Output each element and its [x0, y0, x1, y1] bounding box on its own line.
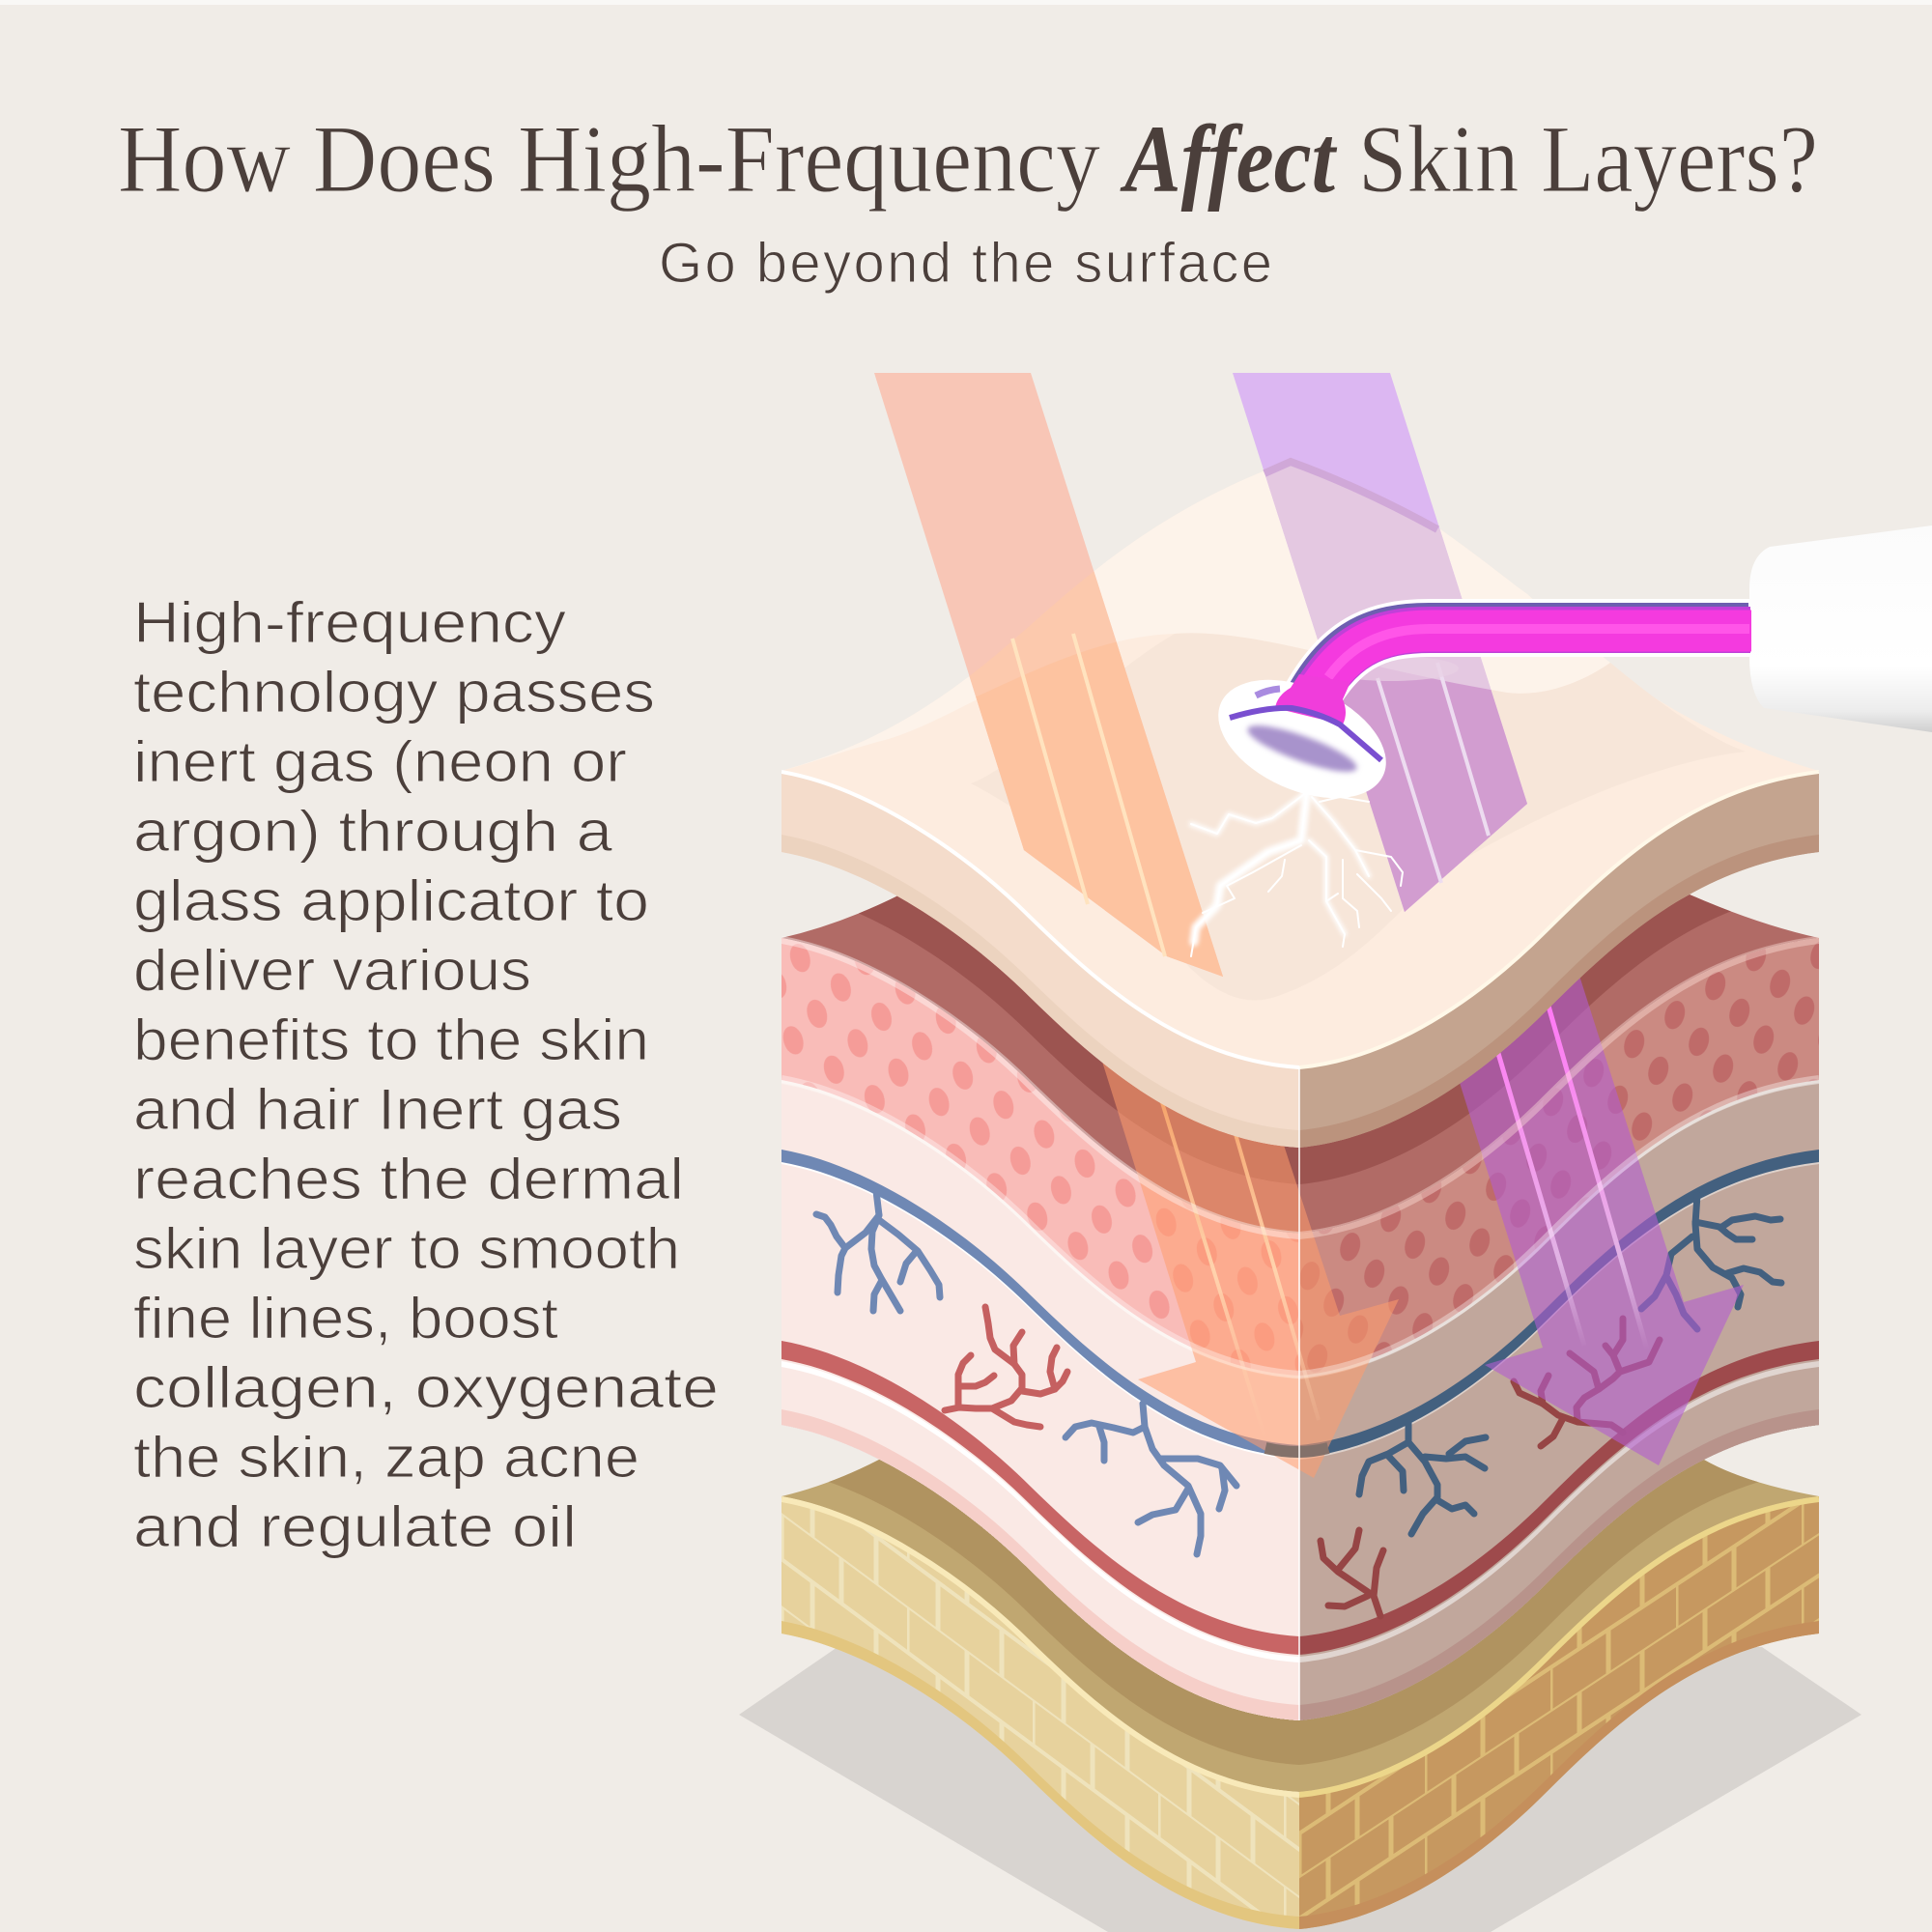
fat top surface [781, 1460, 1819, 1792]
body text: and hair Inert gas [133, 1077, 622, 1142]
body text [133, 590, 719, 1559]
ground shadow [739, 1647, 1861, 1932]
title [118, 105, 1818, 213]
top skin surface [781, 461, 1819, 1066]
top layer front faces [781, 770, 1819, 1148]
body text: benefits to the skin [133, 1008, 649, 1072]
body text: reaches the dermal [133, 1147, 684, 1211]
center vertical edge highlight [1298, 1066, 1300, 1720]
body text: skin layer to smooth [133, 1216, 680, 1281]
arrow: purple penetrating arrow [1451, 952, 1744, 1465]
translucent layer edge highlights [781, 940, 1819, 1375]
blue vein [781, 1150, 1819, 1720]
body text: inert gas (neon or [133, 729, 627, 794]
wand handle [1749, 526, 1932, 732]
arrow: orange penetrating arrow [1094, 1034, 1399, 1478]
body text: the skin, zap acne [133, 1425, 639, 1490]
lightning discharge [1191, 790, 1403, 956]
body text: argon) through a [133, 799, 613, 864]
body text: High-frequency [133, 590, 566, 655]
subtitle: Go beyond the surface [659, 232, 1272, 295]
fat front faces with cells [781, 1496, 1819, 1931]
dotted front faces [781, 938, 1819, 1376]
body text: deliver various [133, 938, 531, 1003]
capillaries right red G [1514, 1319, 1660, 1446]
beam: purple [1233, 373, 1527, 912]
body text: fine lines, boost [133, 1286, 558, 1350]
central dip [971, 633, 1746, 1000]
glass applicator tube [1303, 627, 1751, 713]
fat layer (hypodermis) [781, 1460, 1819, 1929]
title: Skin Layers? [1358, 105, 1818, 213]
body text: collagen, oxygenate [133, 1355, 719, 1420]
capillaries left blue C [1065, 1404, 1236, 1554]
capillaries right blue D [1641, 1195, 1781, 1329]
capillaries left red B [945, 1307, 1067, 1427]
capillaries right blue E [1359, 1423, 1486, 1534]
body text: and regulate oil [133, 1494, 577, 1559]
applicator glass head [1200, 656, 1405, 822]
body text: glass applicator to [133, 868, 649, 933]
upper surface hump [781, 461, 1610, 771]
title: Affect [1120, 105, 1338, 213]
red artery [781, 1341, 1819, 1720]
dermis light layer with blood vessels [781, 1080, 1819, 1720]
body text: technology passes [133, 660, 655, 724]
capillaries left blue A [816, 1191, 940, 1311]
title: How Does High-Frequency [118, 105, 1100, 213]
dermis dotted layer [781, 895, 1819, 1376]
beam: orange [874, 373, 1223, 977]
capillaries right red F [1321, 1530, 1383, 1616]
dermis top surface [781, 895, 1819, 1234]
